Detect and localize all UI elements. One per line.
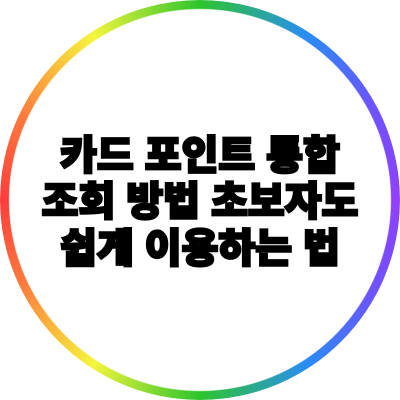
title line 1: 카드 포인트 통합 [60, 134, 340, 178]
title [42, 134, 358, 271]
title line 3: 쉽게 이용하는 법 [60, 227, 340, 271]
title line 2: 조회 방법 초보자도 [42, 180, 358, 224]
